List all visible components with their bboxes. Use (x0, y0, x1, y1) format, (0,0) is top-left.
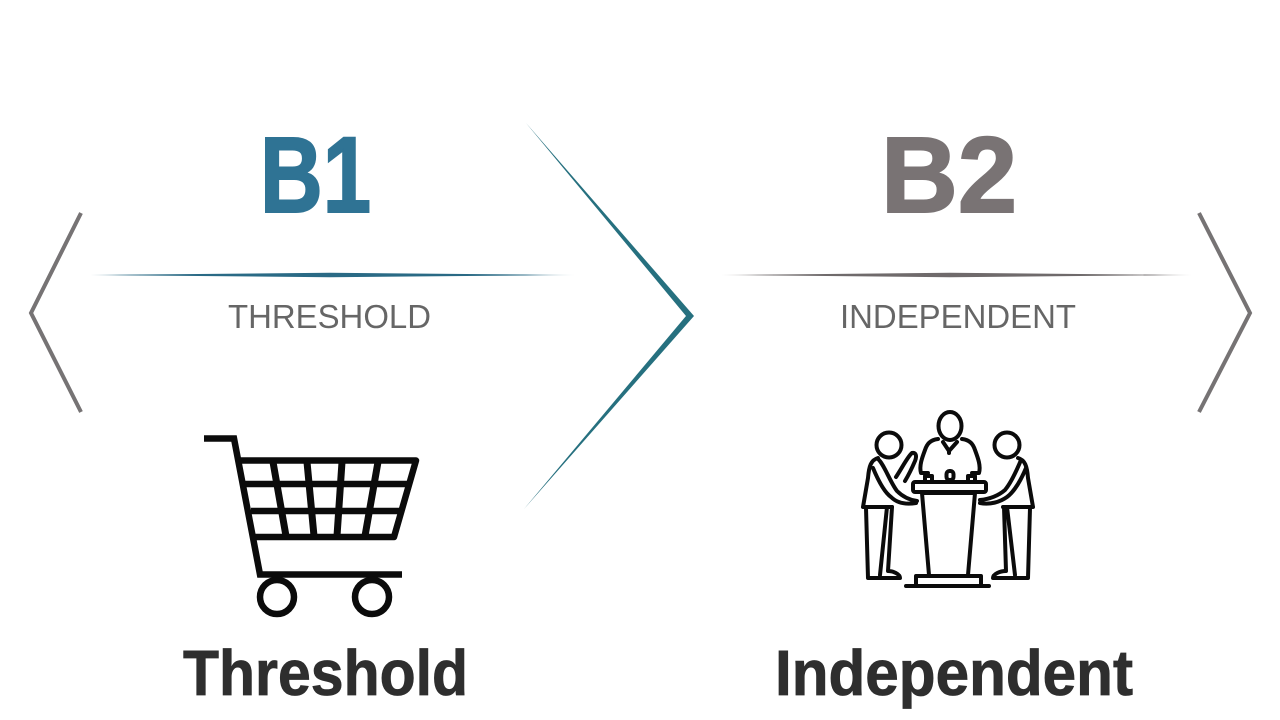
label: Independent: Independent (775, 637, 1133, 709)
icon: left chevron arrow (31, 213, 81, 412)
left person (863, 432, 917, 578)
large teal chevron divider (524, 123, 694, 509)
label: Threshold: Threshold (183, 637, 468, 709)
icon: right chevron arrow (1199, 213, 1250, 412)
teal divider line (90, 273, 575, 277)
heading: B1: B1 (260, 114, 371, 235)
icon: shopping cart (204, 438, 416, 614)
subheading: THRESHOLD: THRESHOLD (228, 298, 431, 335)
icon: three people at a podium (863, 412, 1033, 586)
gray divider line (720, 273, 1192, 277)
subheading: INDEPENDENT: INDEPENDENT (840, 298, 1076, 335)
podium (906, 482, 989, 586)
right person (980, 432, 1033, 578)
center person (920, 412, 980, 481)
heading: B2: B2 (881, 114, 1017, 235)
